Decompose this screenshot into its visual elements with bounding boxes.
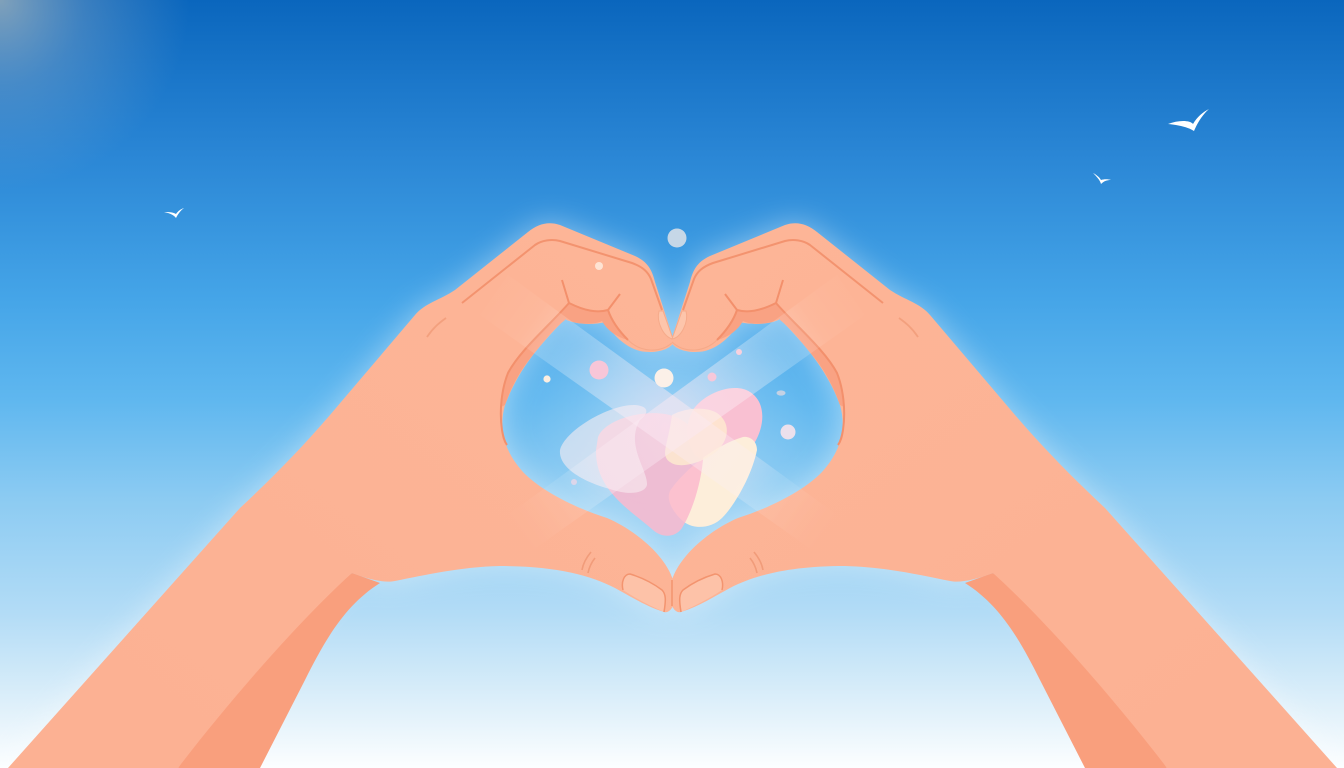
bird: large upper right bbox=[1168, 109, 1209, 131]
bird: small left bbox=[164, 208, 184, 218]
white glow around the hands bbox=[8, 223, 1337, 768]
blob: right pink bbox=[687, 388, 762, 465]
floating sparkles bbox=[543, 228, 796, 485]
right hand bbox=[671, 223, 1337, 768]
abstract heart blobs bbox=[560, 388, 762, 536]
blob: white translucent bbox=[560, 405, 647, 493]
blob: upper cream bbox=[665, 409, 727, 465]
blob: main pink bbox=[596, 413, 703, 536]
left hand bbox=[8, 223, 674, 768]
central light glow bbox=[515, 275, 815, 575]
blob: lower cream bbox=[669, 437, 757, 527]
sun haze in top-left corner bbox=[0, 0, 200, 200]
crossed light beams bbox=[480, 275, 865, 550]
bird: small upper right bbox=[1093, 173, 1111, 184]
